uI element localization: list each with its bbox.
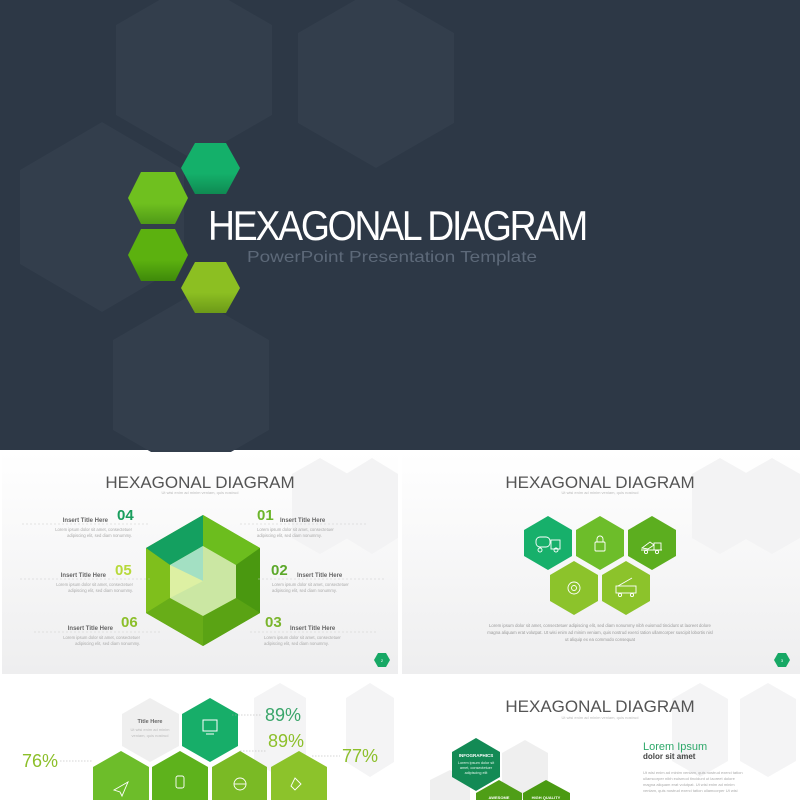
item 03: Insert Title Here bbox=[290, 626, 336, 632]
awesome / high quality hexes: AWESOME bbox=[489, 795, 510, 800]
item 01: Lorem ipsum dolor sit amet, consectetuer bbox=[257, 527, 334, 532]
item 02: 02 bbox=[271, 562, 288, 579]
item 04: Insert Title Here bbox=[63, 518, 109, 524]
title here gray hex: veniam, quis nostrud bbox=[132, 733, 168, 738]
percentages: 89% bbox=[268, 731, 304, 751]
big hexagon bbox=[146, 515, 260, 646]
slide 2: six-part hexagon: Ut wisi enim ad minim veniam, quis nostrud bbox=[162, 490, 238, 495]
lorem ipsum text block: ullamcorper nibh euismod tincidunt ut laoreet dolore bbox=[643, 776, 736, 781]
item 06: 06 bbox=[121, 614, 138, 631]
item 05: Lorem ipsum dolor sit amet, consectetuer bbox=[56, 582, 134, 587]
item 06: Lorem ipsum dolor sit amet, consectetuer bbox=[63, 635, 141, 640]
title here gray hex bbox=[122, 698, 179, 762]
hero slide bbox=[0, 0, 800, 475]
awesome / high quality hexes: HIGH QUALITY bbox=[532, 795, 561, 800]
hero hex cluster bbox=[128, 143, 240, 313]
infographics hex: adipiscing elit bbox=[465, 771, 488, 775]
item 03: 03 bbox=[265, 614, 282, 631]
page number 3: 3 bbox=[781, 658, 784, 663]
icon hexes bbox=[524, 516, 676, 615]
item 04: Lorem ipsum dolor sit amet, consectetuer bbox=[55, 527, 133, 532]
lorem ipsum text block: magna aliquam erat volutpat. Ut wisi enim ad minim bbox=[643, 782, 735, 787]
percentages: 76% bbox=[22, 751, 58, 771]
lorem ipsum text block: dolor sit amet bbox=[643, 752, 696, 761]
slide 4: percentage hexes bbox=[2, 677, 398, 800]
slide 3: icon hexagons: Ut wisi enim ad minim veniam, quis nostrud bbox=[562, 490, 638, 495]
infographics hex: amet, consectetuer bbox=[460, 766, 493, 770]
item 05 bbox=[20, 562, 150, 593]
percentages: 77% bbox=[342, 746, 378, 766]
percentages: 89% bbox=[265, 705, 301, 725]
lorem ipsum text block: veniam, quis nostrud exerci tation ullamcorper Ut wisi bbox=[643, 788, 738, 793]
lorem ipsum text block: Ut wisi enim ad minim veniam, quis nostrud exerci tation bbox=[643, 770, 743, 775]
slide 3: icon hexagons: magna aliquam erat volutpat. Ut wisi enim ad minim veniam, quis nostrud exerci tation ullamcorper suscipit lobortis nisl bbox=[487, 630, 713, 635]
slide 2 title: HEXAGONAL DIAGRAM bbox=[105, 473, 295, 492]
item 01 bbox=[240, 507, 368, 538]
title here gray hex: Title Here bbox=[138, 719, 162, 725]
item 03: adipiscing elit, sed diam nonummy. bbox=[264, 641, 329, 646]
item 04 bbox=[22, 507, 148, 538]
slide 3 body text: Lorem ipsum dolor sit amet, consectetuer adipiscing elit, sed diam nonummy nibh euismod tincidunt ut laoreet dolore bbox=[489, 623, 712, 628]
awesome / high quality hexes bbox=[476, 780, 570, 800]
item 05: adipiscing elit, sed diam nonummy. bbox=[68, 588, 133, 593]
item 06 bbox=[34, 614, 160, 646]
item 02 bbox=[258, 562, 384, 593]
bottom row hexes bbox=[93, 751, 327, 800]
slide 2: six-part hexagon bbox=[2, 452, 398, 674]
item 02: Lorem ipsum dolor sit amet, consectetuer bbox=[272, 582, 349, 587]
lorem ipsum text block bbox=[643, 741, 743, 793]
slide 5 title: HEXAGONAL DIAGRAM bbox=[505, 697, 695, 716]
title here gray hex: Ut wisi enim ad minim bbox=[131, 727, 170, 732]
item 01: 01 bbox=[257, 507, 274, 524]
item 02: adipiscing elit, sed diam nonummy. bbox=[272, 588, 337, 593]
item 04: adipiscing elit, sed diam nonummy. bbox=[67, 533, 132, 538]
infographics hex: Lorem ipsum dolor sit bbox=[458, 761, 495, 765]
item 04: 04 bbox=[117, 507, 134, 524]
item 02: Insert Title Here bbox=[297, 573, 343, 579]
hero title: HEXAGONAL DIAGRAM bbox=[208, 202, 586, 249]
slide 3: icon hexagons: ut aliquip ex ea commodo consequat bbox=[565, 637, 636, 642]
monitor hex bbox=[182, 698, 238, 762]
page number 2 bbox=[374, 653, 390, 667]
item 06: Insert Title Here bbox=[68, 626, 114, 632]
percentages bbox=[22, 705, 378, 771]
slide 5: infographics bbox=[402, 677, 800, 800]
slide 3: icon hexagons bbox=[402, 452, 800, 674]
item 06: adipiscing elit, sed diam nonummy. bbox=[75, 641, 140, 646]
slide 3 title: HEXAGONAL DIAGRAM bbox=[505, 473, 695, 492]
item 01: adipiscing elit, sed diam nonummy. bbox=[257, 533, 322, 538]
infographics hex bbox=[452, 738, 500, 791]
item 01: Insert Title Here bbox=[280, 518, 326, 524]
item 03: Lorem ipsum dolor sit amet, consectetuer bbox=[264, 635, 341, 640]
page number 3 bbox=[774, 653, 790, 667]
item 03 bbox=[250, 614, 378, 646]
hero subtitle: PowerPoint Presentation Template bbox=[247, 249, 537, 266]
page number 2: 2 bbox=[381, 658, 384, 663]
item 05: Insert Title Here bbox=[61, 573, 107, 579]
infographics hex: INFOGRAPHICS bbox=[459, 753, 493, 758]
item 05: 05 bbox=[115, 562, 132, 579]
lorem ipsum text block: Lorem Ipsum bbox=[643, 741, 707, 753]
slide 5: infographics: Ut wisi enim ad minim veniam, quis nostrud bbox=[562, 715, 638, 720]
